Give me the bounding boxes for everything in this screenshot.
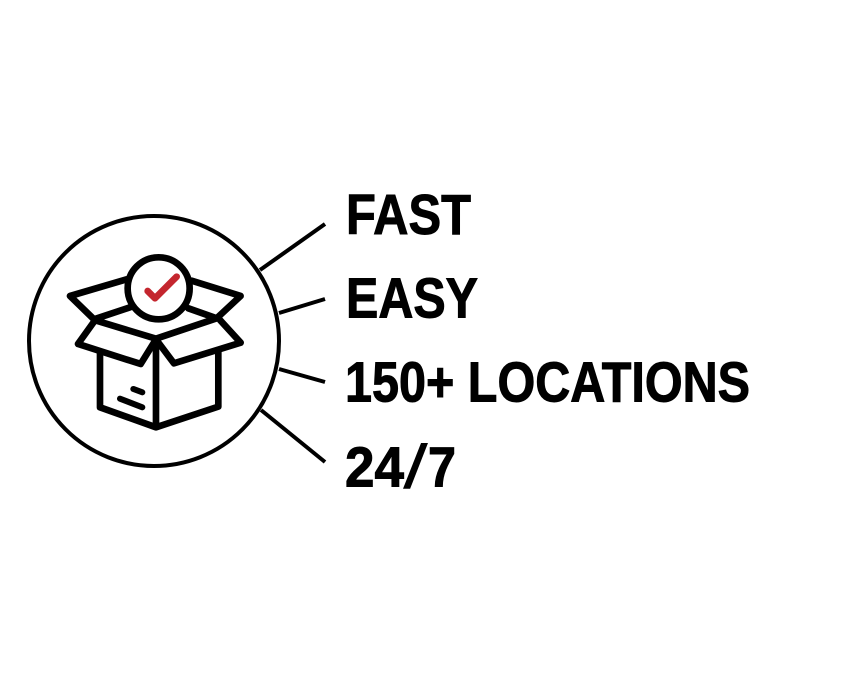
label: 24/7: 7 [428, 436, 456, 500]
label: 24/7: 24 [345, 436, 404, 500]
box back flaps [70, 279, 241, 319]
icon circle [29, 216, 279, 466]
box front flaps [78, 318, 241, 364]
label: 24/7: / [403, 433, 429, 502]
check circle [128, 257, 190, 319]
icon: open box with check mark [70, 257, 241, 427]
label: easy: EASY [346, 266, 478, 330]
icon: red check mark [148, 277, 177, 298]
connector: locations [279, 369, 325, 382]
box label dashes [120, 389, 142, 407]
label: 150+ locations: 150+ LOCATIONS [345, 350, 750, 414]
connector: fast [260, 224, 325, 270]
label: 24/7 [345, 433, 456, 502]
connector: easy [279, 299, 325, 313]
label: fast: FAST [346, 183, 471, 247]
connector: 24/7 [261, 410, 325, 462]
box body [100, 339, 218, 427]
